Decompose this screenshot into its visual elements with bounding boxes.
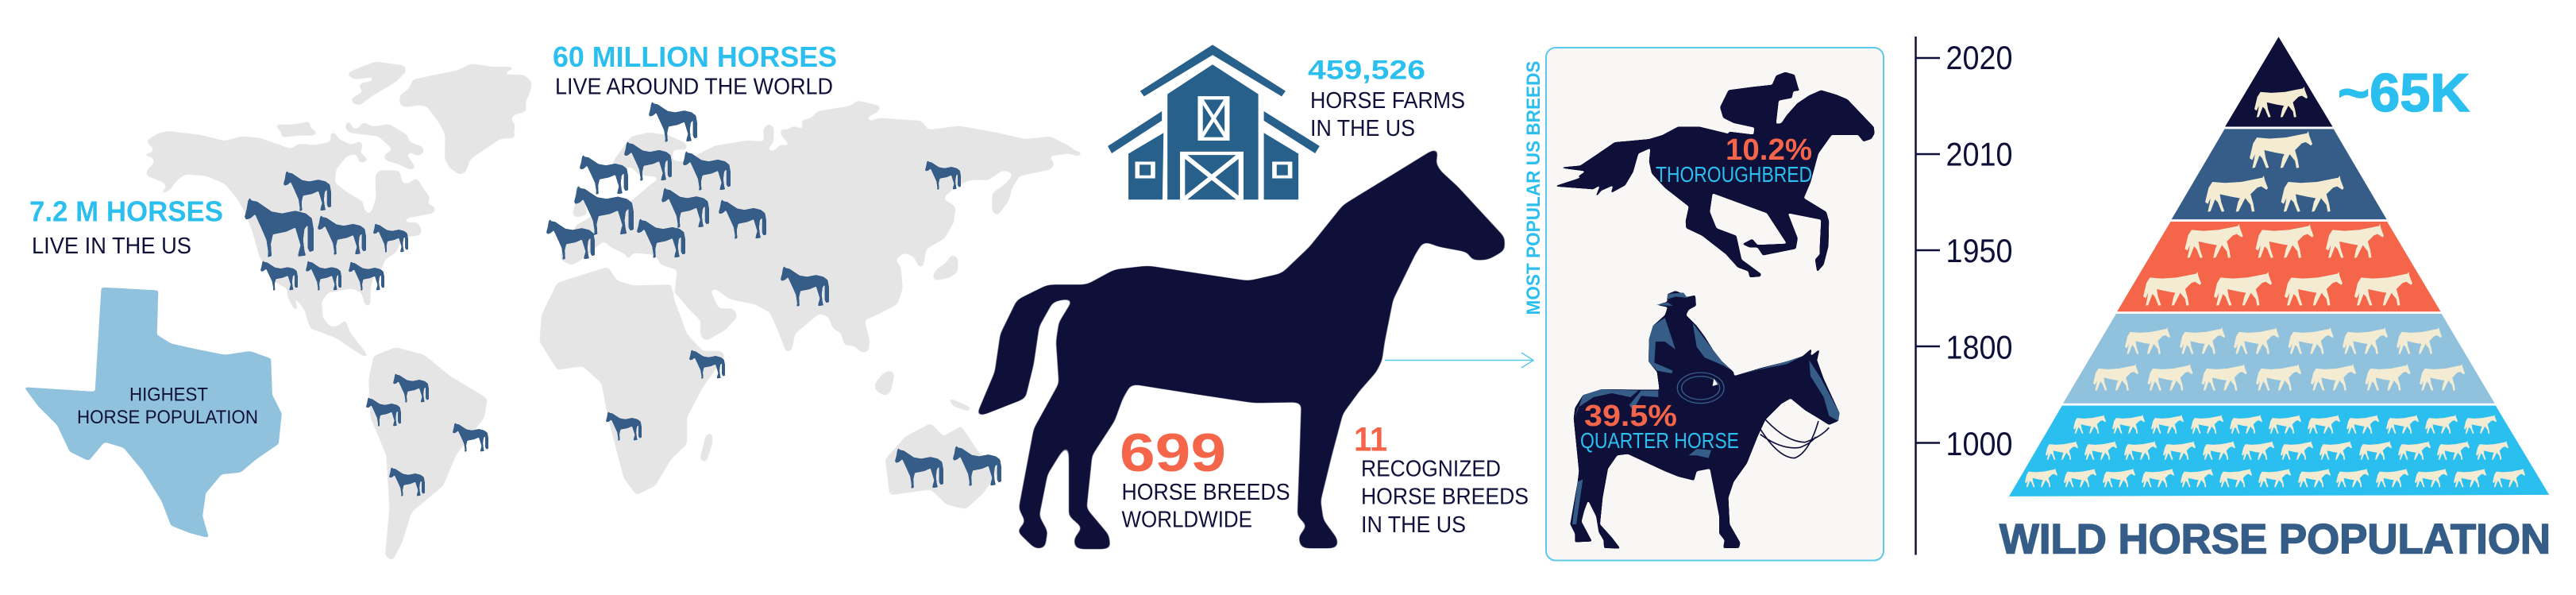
timeline — [1915, 37, 2012, 554]
heading: 60 million horses — [553, 41, 837, 100]
heading: 7.2 M horses — [29, 195, 223, 259]
text: 11 recognized breeds — [1354, 421, 1529, 538]
Texas map — [24, 288, 282, 538]
Texas map: HORSE POPULATION — [77, 407, 258, 428]
text: horse farms — [1308, 56, 1465, 141]
text: horse farms: 459,526 — [1308, 56, 1425, 86]
pyramid chart — [2009, 37, 2549, 496]
text: 699 breeds — [1120, 423, 1290, 532]
heading: 7.2 M horses: LIVE IN THE US — [32, 234, 191, 259]
text: 699 breeds: HORSE BREEDS — [1121, 480, 1290, 505]
panel: popular breeds — [1546, 48, 1884, 561]
text: 11 recognized breeds: 11 — [1354, 421, 1387, 459]
text: 11 recognized breeds: RECOGNIZED — [1361, 456, 1501, 481]
Texas map: HIGHEST — [129, 384, 208, 405]
timeline: 2010 — [1945, 135, 2012, 173]
text: 699 breeds: WORLDWIDE — [1121, 507, 1252, 532]
timeline: 1800 — [1945, 329, 2012, 365]
quarter horse label: QUARTER HORSE — [1580, 428, 1739, 453]
world map — [145, 61, 1082, 561]
text: 11 recognized breeds: HORSE BREEDS — [1361, 485, 1529, 510]
arrow — [1385, 353, 1533, 368]
text: horse farms: IN THE US — [1310, 116, 1415, 141]
text: horse farms: HORSE FARMS — [1310, 88, 1465, 114]
heading: 7.2 M horses: 7.2 M HORSES — [29, 195, 223, 227]
heading: 60 million horses: 60 MILLION HORSES — [553, 41, 837, 73]
icon: barn — [1108, 44, 1320, 199]
icon: horses on the map — [245, 102, 1001, 496]
quarter horse with rider — [1570, 291, 1840, 549]
text: 11 recognized breeds: IN THE US — [1361, 512, 1466, 538]
timeline: 1950 — [1945, 232, 2012, 269]
timeline: 2020 — [1945, 39, 2012, 76]
quarter horse label: 39.5% — [1584, 400, 1677, 433]
callout: ~65K: ~65K — [2338, 63, 2470, 123]
vertical label: most popular US breeds: MOST POPULAR US BREEDS — [1523, 60, 1544, 315]
thoroughbred label — [1656, 133, 1812, 187]
thoroughbred label: 10.2% — [1726, 133, 1812, 167]
title: wild horse population: WILD HORSE POPULATION — [1999, 516, 2551, 562]
quarter horse label — [1580, 400, 1739, 453]
thoroughbred silhouette — [1554, 72, 1875, 277]
text: 699 breeds: 699 — [1120, 423, 1226, 483]
big horse silhouette — [975, 146, 1505, 549]
heading: 60 million horses: LIVE AROUND THE WORLD — [555, 75, 833, 100]
timeline: 1000 — [1945, 425, 2012, 462]
thoroughbred label: THOROUGHBRED — [1656, 162, 1812, 187]
